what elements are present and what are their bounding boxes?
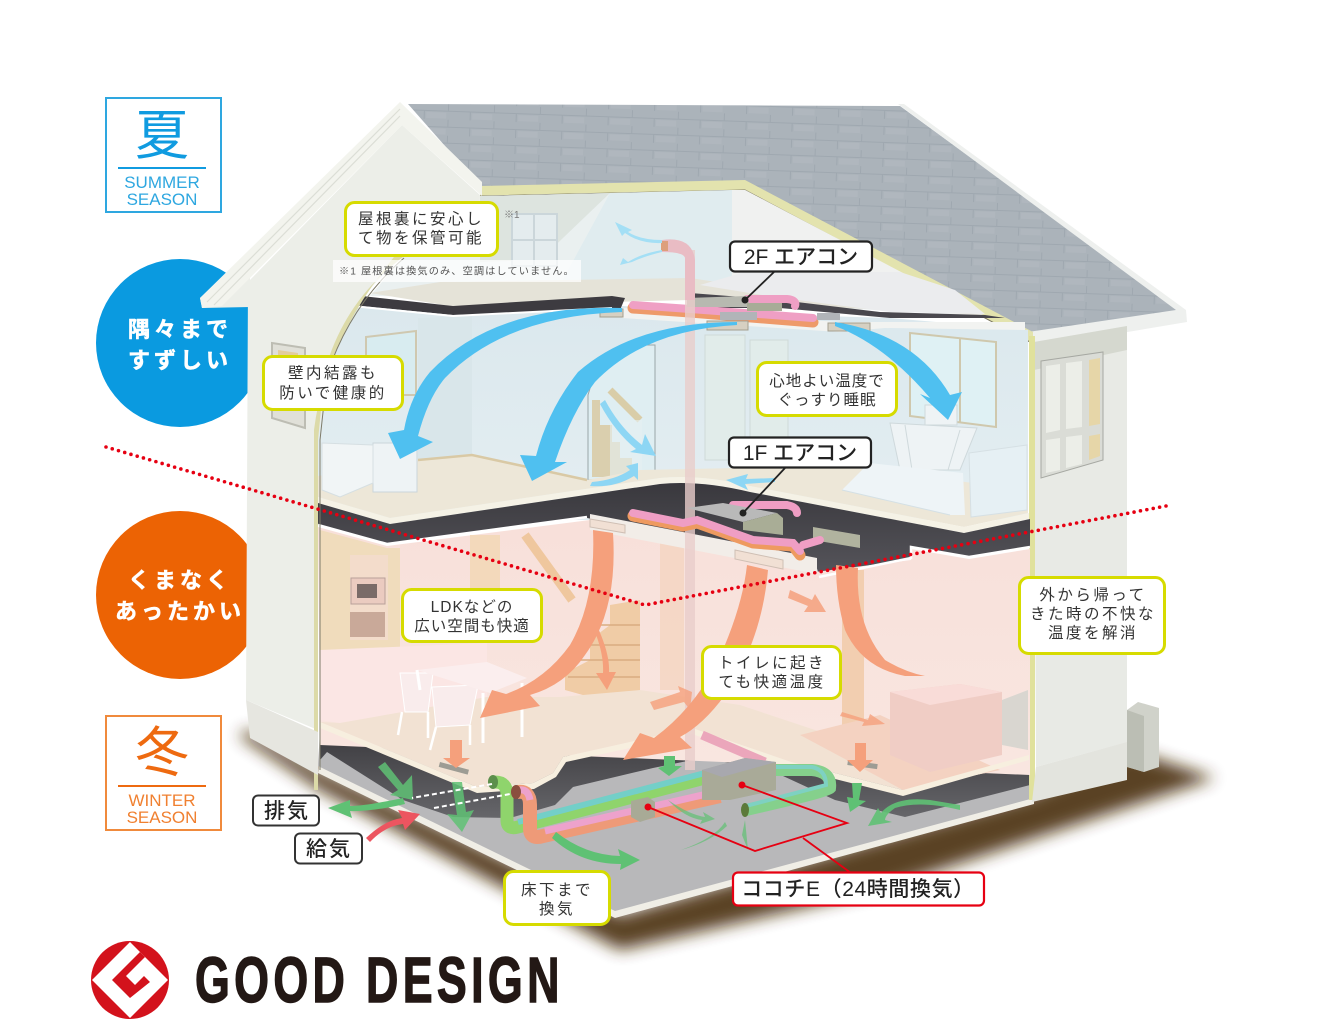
label: LDK — [402, 590, 542, 642]
insulation strip — [480, 180, 1033, 344]
ground shadow — [238, 730, 1215, 950]
roof — [408, 104, 1182, 336]
summer badge: SEASON — [127, 190, 197, 209]
dashed air arrows — [412, 784, 510, 808]
label: 1F aircon — [729, 438, 871, 516]
label: toilet: ても快適温度 — [718, 673, 826, 691]
red supply arrow — [366, 810, 420, 842]
2F front floor edge — [318, 477, 1029, 533]
right fascia — [898, 104, 1187, 348]
label: coming home: 温度を解消 — [1048, 624, 1138, 642]
arrow: thin intake swirls — [668, 800, 748, 850]
label: sleep — [758, 362, 896, 416]
attic floor — [370, 278, 985, 315]
2F floor — [318, 455, 1028, 527]
small unit — [631, 797, 655, 822]
label: LDK: LDKなどの — [431, 598, 513, 616]
eave underside — [200, 250, 250, 308]
label: wall condensation: 壁内結露も — [288, 364, 378, 382]
arrow: vent LDK — [443, 740, 470, 768]
green airflow arrows — [328, 756, 960, 870]
arrow: unit — [658, 756, 682, 776]
label: coming home: 外から帰って — [1039, 586, 1147, 604]
mid-floor dark band — [318, 483, 1030, 577]
summer circle text: 隅々まで — [128, 317, 232, 342]
right wall window — [1041, 352, 1103, 478]
2F ceiling beam — [622, 308, 1025, 332]
blue airflow arrows — [388, 222, 962, 490]
summer badge: SUMMER — [124, 173, 200, 192]
dotted divider line — [106, 447, 1166, 605]
label: attic storage — [346, 202, 498, 256]
1F pillars — [470, 535, 864, 740]
winter badge: WINTER — [128, 791, 196, 810]
label: 1F aircon: 1F エアコン — [743, 442, 857, 465]
arrow: small — [788, 590, 826, 612]
summer circle text — [128, 317, 232, 373]
label: attic storage: て物を保管可能 — [358, 229, 484, 247]
arrow: right — [847, 783, 866, 812]
bathtub — [890, 684, 1028, 772]
label: underfloor: 床下まで — [521, 881, 593, 899]
beam vents — [590, 519, 783, 569]
footnote: ※1 屋根裏は換気のみ、空調はしていません。 — [339, 264, 575, 278]
arrow: vent bath — [847, 743, 873, 772]
ground slab — [318, 760, 1034, 918]
good design wordmark: GOOD DESIGN — [195, 944, 564, 1016]
2F window right — [910, 333, 996, 427]
label: toilet — [702, 646, 840, 698]
label: LDK: 広い空間も快適 — [414, 617, 530, 635]
attic shelf — [512, 214, 557, 266]
duct 1F — [633, 505, 820, 555]
bathroom tile — [800, 715, 1000, 790]
arrow: 1F dining — [480, 530, 614, 718]
arrow: 2F centre — [520, 322, 737, 481]
gable fascia — [200, 102, 482, 308]
summer badge: 夏 — [135, 106, 189, 166]
green duct — [495, 767, 830, 828]
tag: kokochi E: ココチE（24時間換気） — [741, 878, 975, 901]
staircase 1F — [525, 535, 640, 697]
footnote — [333, 260, 581, 282]
2F ceiling dark — [352, 296, 625, 315]
winter badge: 冬 — [135, 723, 189, 783]
label: wall condensation — [264, 356, 402, 410]
attic space — [370, 190, 985, 316]
arrow: stairs — [600, 400, 656, 456]
tag: kokochi E — [733, 872, 984, 906]
pink duct — [517, 790, 720, 837]
outdoor unit — [1127, 702, 1159, 772]
big unit — [702, 758, 776, 800]
winter circle text — [115, 568, 245, 624]
floor vents — [439, 760, 878, 775]
2F furniture left — [322, 443, 417, 497]
winter badge: SEASON — [127, 808, 197, 827]
winter circle text: くまなく — [128, 568, 232, 593]
doors — [705, 335, 788, 460]
circle: winter message — [96, 511, 247, 679]
winter badge — [106, 716, 221, 830]
unit 1F far — [813, 527, 860, 548]
2F bed — [842, 445, 1027, 517]
arrow: crawl — [552, 832, 640, 870]
label: attic storage: 屋根裏に安心し — [358, 210, 484, 228]
duct behind — [702, 735, 765, 762]
label: 2F aircon — [730, 242, 872, 304]
1F rooms — [318, 520, 1030, 775]
circle: summer message — [96, 259, 264, 427]
label: underfloor — [504, 872, 610, 924]
arrow: duct — [447, 782, 474, 832]
vents 2F — [600, 309, 870, 331]
arrow: stairs — [595, 628, 616, 690]
dining table — [398, 662, 527, 750]
tag: supply: 給気 — [306, 838, 352, 861]
good design logo — [91, 941, 169, 1019]
winter circle text: あったかい — [115, 599, 245, 624]
arrow: left — [378, 762, 413, 800]
arrow: stairs lower — [590, 463, 638, 486]
2F desk — [890, 405, 977, 470]
label: toilet: トイレに起き — [718, 654, 826, 672]
orange airflow arrows — [443, 530, 925, 772]
left wall base — [246, 700, 318, 775]
label: sleep: ぐっすり睡眠 — [777, 391, 877, 409]
summer badge — [106, 98, 221, 212]
label: 2F aircon: 2F エアコン — [744, 246, 858, 269]
arrow: 2F right — [835, 322, 962, 420]
staircase arch — [588, 345, 655, 480]
right exterior wall — [1034, 326, 1127, 767]
label: wall condensation: 防いで健康的 — [279, 384, 387, 402]
crawl space dark — [320, 723, 1030, 818]
arrow: exhaust — [328, 798, 405, 818]
gable left window sliver — [272, 343, 305, 428]
footnote mark: ※1 — [504, 210, 520, 221]
2F window left — [366, 331, 416, 395]
1F floor wood — [320, 690, 1000, 790]
summer circle text: すずしい — [128, 348, 232, 373]
label: coming home — [1020, 578, 1164, 654]
arrow: toward pipe — [650, 686, 692, 710]
arrow: far right — [868, 799, 960, 826]
label: sleep: 心地よい温度で — [769, 372, 885, 390]
tag: exhaust — [253, 796, 319, 826]
arrow: 1F toilet — [623, 565, 768, 760]
duct ends — [488, 775, 749, 817]
arrow: attic — [615, 222, 662, 265]
arrow: 1F unit — [726, 474, 775, 490]
right base — [1032, 742, 1127, 802]
2F floor baseboard — [418, 455, 587, 480]
red leader lines — [648, 785, 851, 873]
leader dots — [644, 782, 746, 810]
left exterior wall and gable — [246, 125, 480, 730]
arrow: 1F bath — [836, 565, 925, 676]
kitchen counter — [320, 643, 487, 723]
duct vertical — [661, 239, 695, 770]
unit 1F — [687, 503, 783, 535]
tag: exhaust: 排気 — [264, 800, 310, 823]
unit 2F — [687, 296, 840, 320]
2F rooms — [318, 305, 1028, 520]
arrow: bath floor — [840, 712, 885, 726]
tag: supply — [295, 834, 362, 864]
label: underfloor: 換気 — [539, 900, 575, 918]
house cutaway illustration — [200, 102, 1187, 918]
label: coming home: きた時の不快な — [1030, 605, 1156, 623]
arrow: 2F left — [388, 308, 622, 459]
kitchen cupboards — [320, 530, 400, 668]
floor front edge — [320, 722, 1029, 796]
duct 2F — [633, 299, 813, 322]
mid white beam — [590, 514, 817, 574]
